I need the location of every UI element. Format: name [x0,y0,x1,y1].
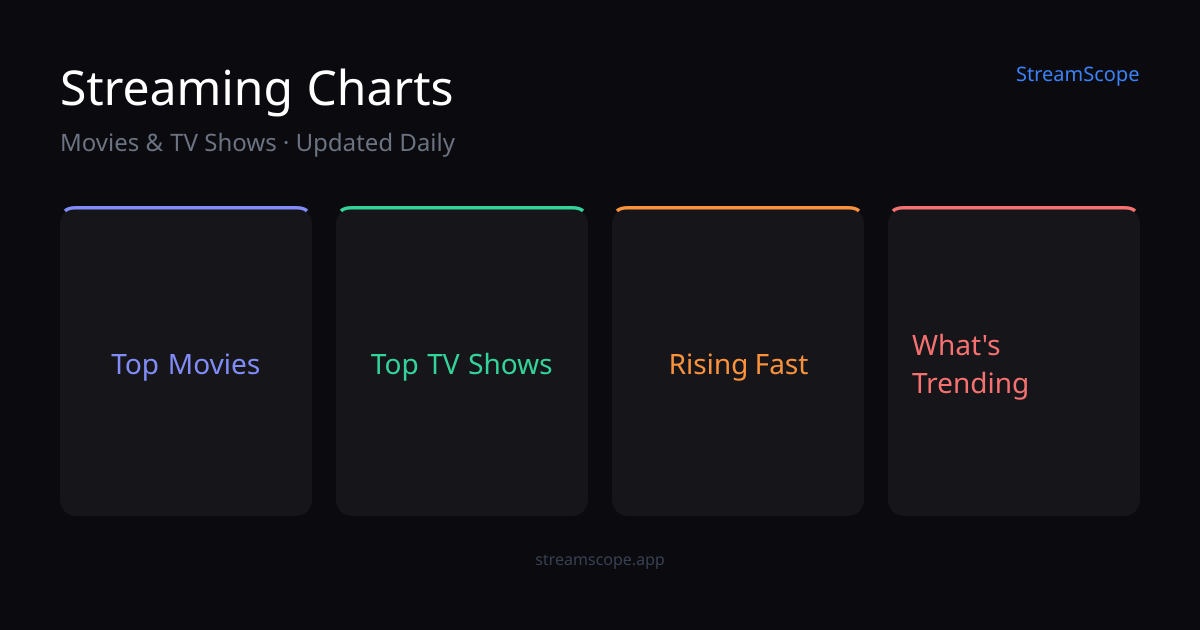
card: Rising Fast: Rising Fast [669,345,808,383]
card: Top TV Shows: Top TV Shows [371,345,553,383]
card: Top Movies [60,208,312,516]
card: Top TV Shows [336,208,588,516]
card: Top Movies: Top Movies [111,345,260,383]
title: Streaming Charts [60,55,454,120]
brand label: StreamScope [1016,60,1140,87]
footer: streamscope.app [535,548,665,570]
subtitle: Movies & TV Shows · Updated Daily [60,126,455,159]
card: Rising Fast [612,208,864,516]
card: What's Trending [888,208,1140,516]
card: What's Trending: What's Trending [912,326,1029,402]
